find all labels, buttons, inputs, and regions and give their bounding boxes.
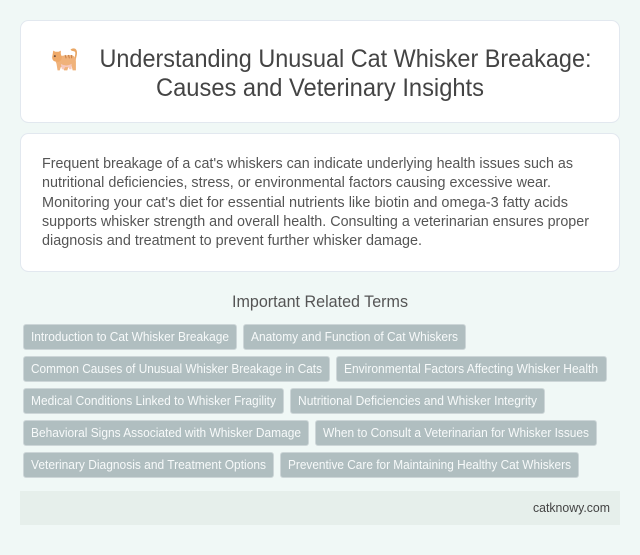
tag: Veterinary Diagnosis and Treatment Options bbox=[31, 458, 266, 472]
tag bbox=[24, 420, 308, 446]
tag bbox=[316, 420, 596, 446]
tag bbox=[24, 388, 284, 414]
footer text: catknowy.com bbox=[533, 501, 610, 515]
icon: cat bbox=[52, 48, 77, 70]
footer bbox=[20, 491, 620, 525]
tag bbox=[280, 452, 578, 478]
tag: Preventive Care for Maintaining Healthy Cat Whiskers bbox=[288, 458, 571, 472]
text block: description: diagnosis and treatment to prevent further whisker damage. bbox=[42, 233, 422, 249]
tag: Introduction to Cat Whisker Breakage bbox=[31, 330, 229, 344]
title: Understanding Unusual Cat Whisker Breakage: bbox=[100, 45, 592, 73]
text block: description: Monitoring your cat's diet for essential nutrients like biotin and omega-3 fatty acids bbox=[42, 195, 568, 211]
tag bbox=[244, 324, 466, 350]
header panel bbox=[20, 20, 620, 122]
text block: description: nutritional deficiencies, stress, or environmental factors causing excessive wear. bbox=[42, 175, 551, 191]
tag: Common Causes of Unusual Whisker Breakage in Cats bbox=[31, 362, 322, 376]
tag: Medical Conditions Linked to Whisker Fragility bbox=[31, 394, 277, 408]
tag: Nutritional Deficiencies and Whisker Integrity bbox=[298, 394, 538, 408]
title: Causes and Veterinary Insights bbox=[156, 74, 484, 102]
text block: description: Frequent breakage of a cat's whiskers can indicate underlying health issues such as bbox=[42, 156, 573, 172]
title bbox=[100, 45, 592, 102]
tag: Behavioral Signs Associated with Whisker Damage bbox=[31, 426, 301, 440]
panel: description bbox=[20, 134, 620, 272]
tag: Anatomy and Function of Cat Whiskers bbox=[251, 330, 458, 344]
tag bbox=[24, 324, 236, 350]
tag bbox=[24, 452, 274, 478]
text block: description bbox=[42, 156, 589, 249]
heading: related terms: Important Related Terms bbox=[232, 293, 408, 311]
tag: When to Consult a Veterinarian for Whisker Issues bbox=[323, 426, 589, 440]
tag: Environmental Factors Affecting Whisker Health bbox=[344, 362, 598, 376]
tags: related terms bbox=[24, 324, 606, 478]
tag bbox=[24, 356, 330, 382]
tag bbox=[290, 388, 544, 414]
tag bbox=[336, 356, 606, 382]
text block: description: supports whisker strength and overall health. Consulting a veterinarian ensures proper bbox=[42, 214, 589, 230]
